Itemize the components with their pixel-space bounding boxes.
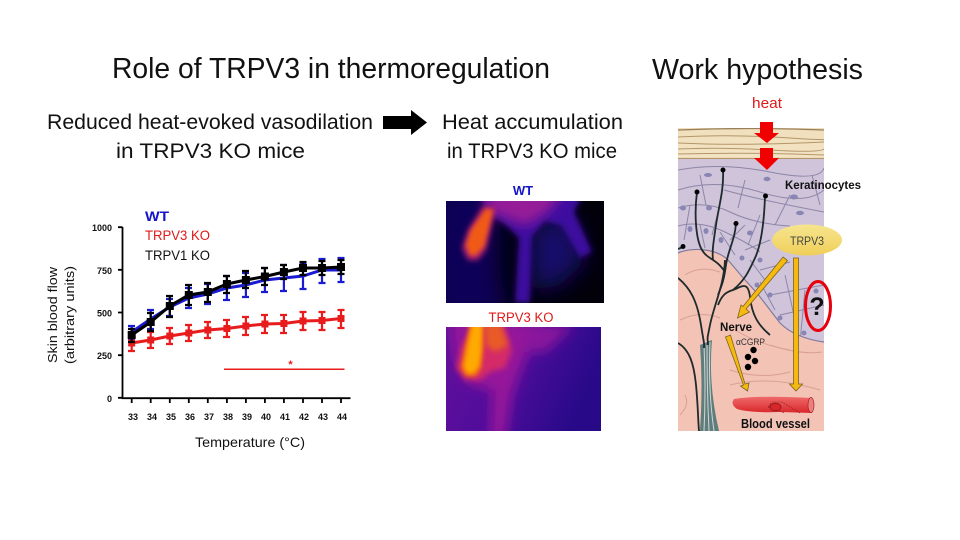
x tick labels: 43 — [318, 412, 328, 422]
question mark callout: ? — [809, 293, 825, 321]
yellow arrow: TRPV3 to blood vessel — [790, 258, 802, 391]
dermis — [678, 249, 824, 431]
x tick labels: 37 — [204, 412, 214, 422]
label: nerve: Nerve — [720, 320, 752, 334]
y tick labels: 0 — [107, 394, 112, 404]
blood vessel — [733, 397, 814, 413]
x tick labels: 34 — [147, 412, 157, 422]
x tick labels: 40 — [261, 412, 271, 422]
y tick labels: 500 — [97, 308, 112, 318]
y axis title — [45, 266, 77, 364]
x axis title: Temperature (°C) — [195, 434, 305, 450]
cell outlines — [678, 166, 824, 342]
x tick labels — [128, 412, 347, 422]
x tick labels: 36 — [185, 412, 195, 422]
x tick labels: 42 — [299, 412, 309, 422]
significance bar — [224, 359, 344, 371]
thermal image: WT — [446, 201, 604, 303]
y tick labels: 250 — [97, 351, 112, 361]
y tick labels: 750 — [97, 266, 112, 276]
TRPV3 channel — [772, 224, 842, 256]
yellow arrow: TRPV3 to nerve — [738, 257, 788, 318]
series: WT — [128, 258, 344, 339]
x tick labels: 35 — [166, 412, 176, 422]
red arrow 2 — [754, 148, 779, 170]
nerve endings — [680, 168, 768, 249]
label: blood vessel: Blood vessel — [741, 417, 810, 431]
thermal image: TRPV3 KO — [446, 327, 601, 431]
axes — [118, 227, 350, 403]
x tick labels: 33 — [128, 412, 138, 422]
nerve fibres — [678, 170, 770, 431]
y axis title: Skin blood flow — [45, 266, 60, 363]
nerve trunk — [700, 340, 719, 431]
label: WT thermal image: WT — [513, 183, 533, 198]
line chart: skin blood flow — [45, 208, 350, 450]
CGRP dots — [745, 347, 758, 370]
label: heat: heat — [752, 95, 783, 112]
heading: heat accumulation: Heat accumulation — [442, 111, 623, 134]
x tick labels: 38 — [223, 412, 233, 422]
legend: TRPV3 KO — [145, 227, 210, 243]
series: TRPV3 KO — [128, 310, 344, 351]
y axis title: (arbitrary units) — [62, 266, 77, 364]
series: TRPV1 KO — [128, 260, 345, 342]
title: Role of TRPV3 in thermoregulation — [112, 53, 550, 85]
heading: reduced vasodilation: in TRPV3 KO mice — [116, 140, 305, 163]
arrow: vasodilation to heat accumulation — [383, 110, 427, 135]
heading: work hypothesis: Work hypothesis — [652, 54, 863, 86]
red arrow 1 — [754, 122, 779, 143]
x tick labels: 44 — [337, 412, 347, 422]
legend: WT — [145, 208, 169, 224]
label: keratinocytes: Keratinocytes — [785, 180, 861, 192]
epidermis — [678, 159, 824, 349]
heading: heat accumulation — [442, 111, 623, 163]
heading: heat accumulation: in TRPV3 KO mice — [447, 140, 617, 163]
legend: TRPV1 KO — [145, 247, 210, 263]
nuclei — [680, 173, 818, 336]
TRPV3 channel: TRPV3 — [790, 236, 824, 248]
y tick labels: 1000 — [92, 223, 112, 233]
label: TRPV3 KO thermal image: TRPV3 KO — [488, 310, 554, 325]
y tick labels — [92, 223, 112, 404]
heading: reduced vasodilation — [47, 111, 373, 163]
legend — [145, 208, 210, 263]
x tick labels: 39 — [242, 412, 252, 422]
question mark callout — [806, 282, 830, 330]
label: aCGRP: αCGRP — [736, 337, 765, 348]
stratum corneum — [678, 128, 832, 431]
x tick labels: 41 — [280, 412, 290, 422]
yellow arrow: nerve to blood vessel — [726, 335, 749, 391]
significance bar: * — [288, 359, 293, 371]
heading: reduced vasodilation: Reduced heat-evoked vasodilation — [47, 111, 373, 134]
skin diagram — [678, 122, 861, 431]
